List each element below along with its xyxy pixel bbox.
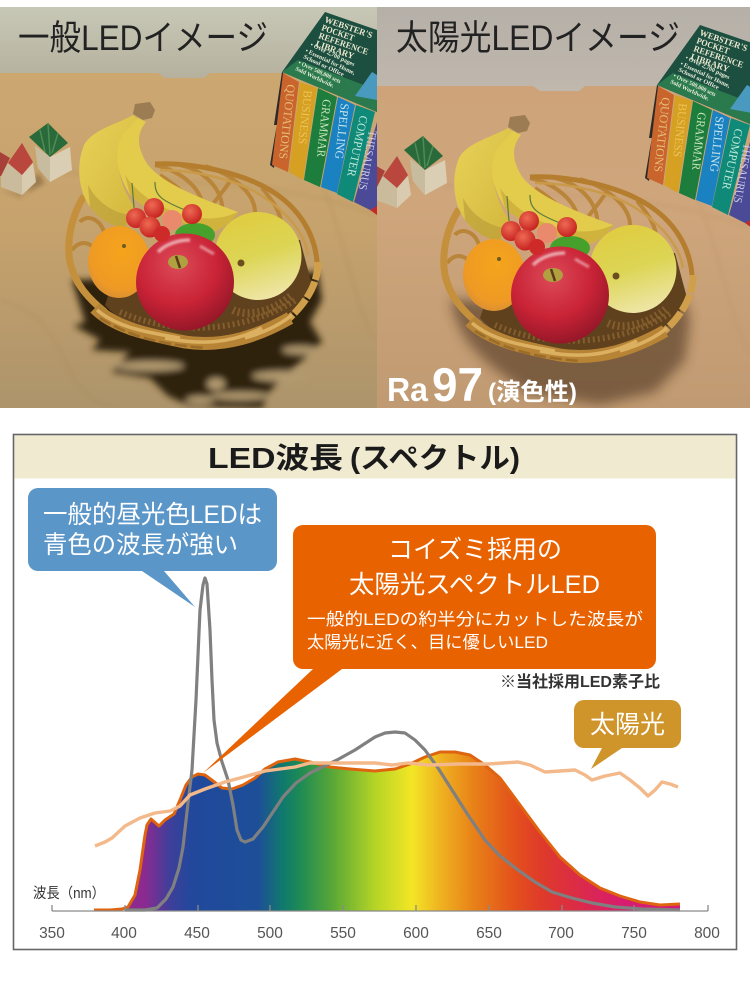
chart header band [14, 436, 736, 478]
chart title [208, 442, 520, 475]
Ra97 label: Ra [387, 371, 429, 408]
callout: orange, Koizumi sunlight LED: 太陽光スペクトルLED [349, 571, 600, 599]
x axis: 550 [330, 925, 356, 942]
books box [270, 12, 380, 215]
callout: orange, Koizumi sunlight LED: コイズミ採用の [388, 536, 562, 564]
chart title: LED波長 [208, 442, 343, 475]
x axis: 750 [621, 925, 647, 942]
x axis: 450 [184, 925, 210, 942]
callout: sunlight: 太陽光 [590, 711, 665, 739]
photo: standard LED image [0, 7, 380, 408]
orange LED outline [94, 752, 680, 910]
x axis [39, 905, 720, 942]
x axis: 800 [694, 925, 720, 942]
x axis: 650 [476, 925, 502, 942]
Ra97 label: (演色性) [488, 379, 577, 406]
fruit [79, 102, 302, 330]
heading: sunlight LED: 太陽光LEDイメージ [396, 19, 680, 58]
wicker basket [444, 177, 693, 361]
callout: orange, Koizumi sunlight LED: 一般的LEDの約半分にカットした波長が [307, 610, 643, 629]
callout: blue, standard LED: 青色の波長が強い [43, 532, 238, 559]
x axis: 400 [111, 925, 137, 942]
footnote: ※当社採用LED素子比 [500, 673, 660, 691]
photo: sunlight LED image [375, 7, 750, 408]
callout: orange, Koizumi sunlight LED: 太陽光に近く、目に優しいLED [307, 633, 548, 652]
panel: LED spectrum chart [14, 434, 736, 950]
sunlight curve [95, 762, 678, 846]
callout: sunlight [574, 700, 681, 769]
axis label: wavelength: 波長（nm） [33, 885, 105, 902]
fruit [454, 115, 676, 344]
callout: blue, standard LED: 一般的昼光色LEDは [43, 501, 262, 529]
chart title: (スペクトル) [350, 443, 520, 475]
x axis: 600 [403, 925, 429, 942]
x axis: 500 [257, 925, 283, 942]
x axis: 700 [548, 925, 574, 942]
books box [645, 25, 750, 228]
x axis: 350 [39, 925, 65, 942]
icon: miniature houses [0, 123, 72, 195]
callout: blue, standard LED [28, 488, 277, 607]
Ra97 label [387, 358, 577, 411]
wicker basket [69, 164, 318, 348]
icon: miniature houses [375, 136, 447, 208]
spectrum fill curve [125, 752, 680, 911]
Ra97 label: 97 [432, 358, 483, 411]
callout: orange, Koizumi sunlight LED [203, 525, 656, 773]
grey standard LED curve [125, 578, 680, 910]
heading: standard LED: 一般LEDイメージ [18, 19, 268, 58]
